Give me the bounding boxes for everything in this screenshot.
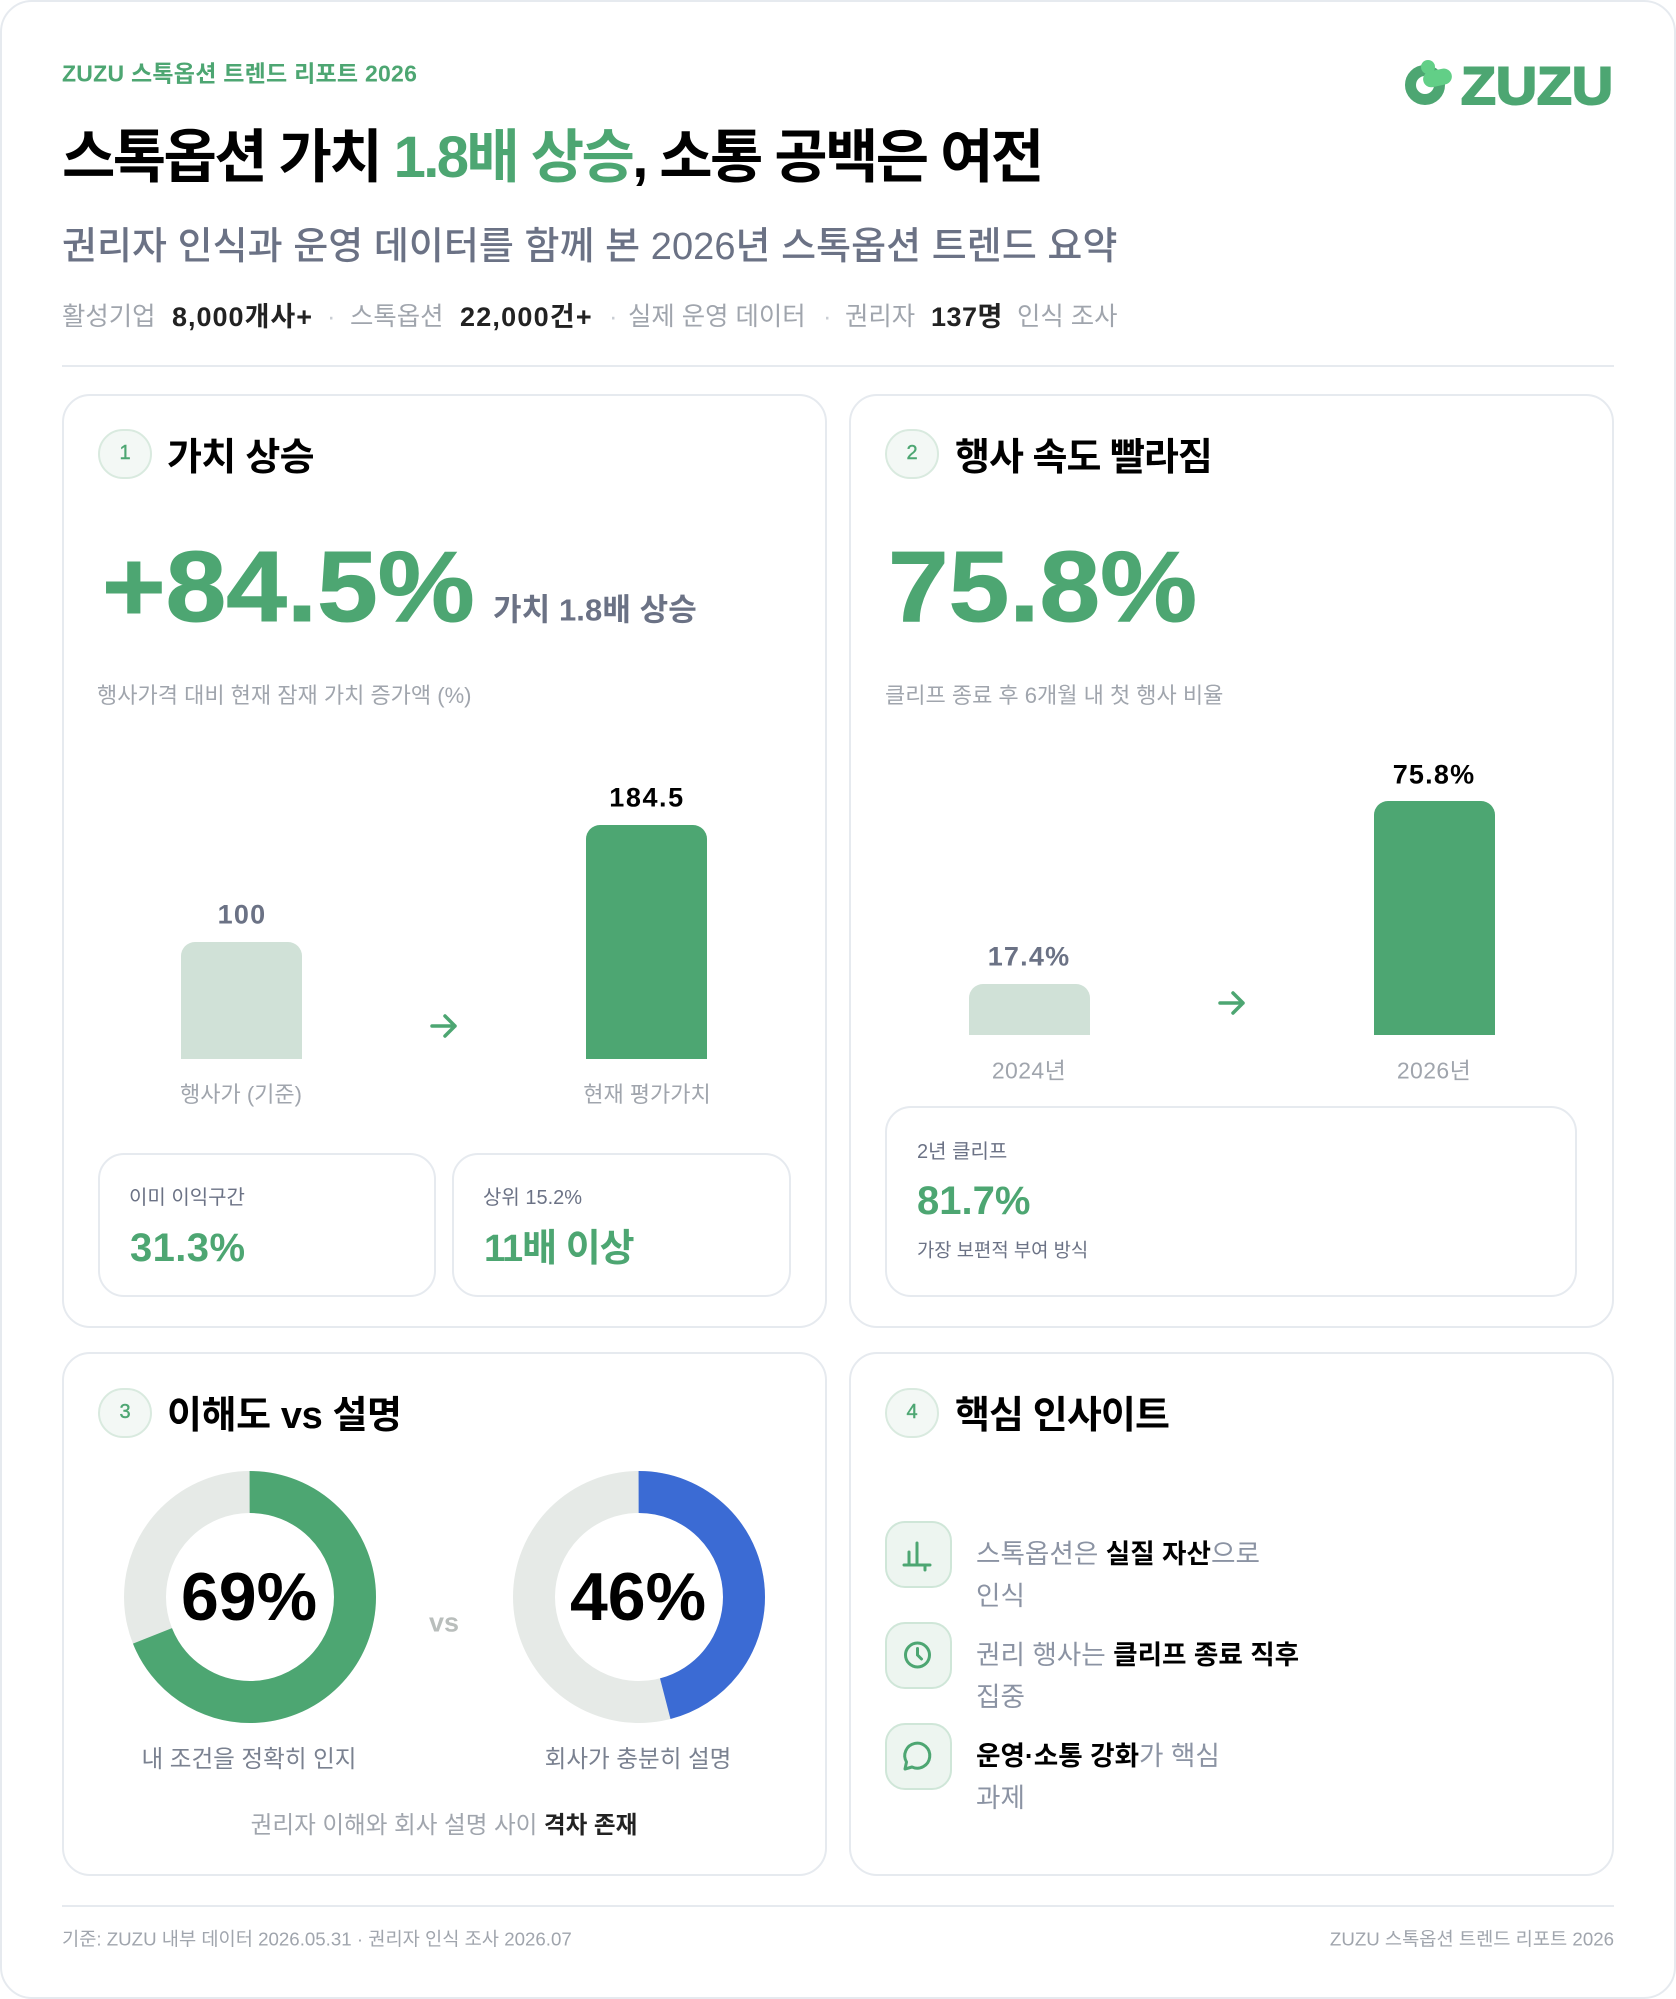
donut 69: 69% xyxy=(181,1559,317,1635)
stat card: profit xyxy=(98,1153,436,1297)
footer source: 기준: ZUZU 내부 데이터 2026.05.31 · 권리자 인식 조사 2026.07 xyxy=(62,1929,572,1950)
label 100: 100 xyxy=(218,900,266,930)
bar chart: value xyxy=(180,782,711,1107)
arrow 2 xyxy=(1218,991,1245,1015)
stats row: 137명 xyxy=(931,302,1003,332)
logo xyxy=(1405,57,1613,116)
title: 스톡옵션 가치 1.8배 상승, 소통 공백은 여전 xyxy=(62,125,1042,190)
label: 상위 15.2% xyxy=(483,1187,582,1209)
stats row: 권리자 xyxy=(845,303,915,331)
badge 4: 4 xyxy=(906,1401,918,1423)
heading 4: 핵심 인사이트 xyxy=(955,1395,1169,1437)
insight 2: 권리 행사는 클리프 종료 직후 xyxy=(976,1640,1299,1670)
value: 81.7% xyxy=(917,1179,1030,1223)
heading 3: 이해도 vs 설명 xyxy=(167,1395,402,1437)
stats row: 8,000개사+ xyxy=(172,302,313,332)
vs label: vs xyxy=(429,1608,459,1638)
donut 46 xyxy=(513,1471,765,1723)
stats row: · xyxy=(823,303,831,331)
donut 69 xyxy=(124,1471,376,1723)
insight 3: 과제 xyxy=(976,1783,1025,1813)
current axis label: 현재 평가가치 xyxy=(583,1082,711,1107)
insight 3 xyxy=(976,1741,1220,1813)
stats row xyxy=(62,302,1118,332)
label 184.5: 184.5 xyxy=(609,782,685,812)
base bar xyxy=(181,942,302,1059)
value: 11배 이상 xyxy=(484,1228,634,1270)
big stat 75.8: 75.8% xyxy=(888,531,1197,643)
badge 1: 1 xyxy=(119,442,131,464)
stat note: 가치 1.8배 상승 xyxy=(493,592,697,628)
panel: understanding xyxy=(62,1352,827,1876)
base axis label: 행사가 (기준) xyxy=(180,1082,302,1107)
stats row: · xyxy=(609,303,617,331)
label: 2년 클리프 xyxy=(917,1141,1007,1163)
subtitle: 권리자 인식과 운영 데이터를 함께 본 2026년 스톡옵션 트렌드 요약 xyxy=(62,226,1117,268)
badge 4 xyxy=(885,1388,939,1438)
panel: exercise speed xyxy=(849,394,1614,1328)
caption 2: 클리프 종료 후 6개월 내 첫 행사 비율 xyxy=(885,683,1223,708)
caption 1: 행사가격 대비 현재 잠재 가치 증가액 (%) xyxy=(97,683,472,708)
2024 axis label: 2024년 xyxy=(992,1058,1066,1084)
stats row: · xyxy=(327,303,335,331)
logo: ZUZU xyxy=(1461,57,1613,116)
arrow 1 xyxy=(430,1014,457,1038)
value: 31.3% xyxy=(130,1226,245,1270)
label: 이미 이익구간 xyxy=(129,1187,245,1209)
gap note: 권리자 이해와 회사 설명 사이 격차 존재 xyxy=(251,1813,637,1839)
stats row: 인식 조사 xyxy=(1017,303,1118,331)
donut 46: 46% xyxy=(570,1559,706,1635)
heading 1: 가치 상승 xyxy=(167,437,314,479)
donut label right: 회사가 충분히 설명 xyxy=(545,1747,731,1773)
note: 가장 보편적 부여 방식 xyxy=(917,1240,1088,1261)
footer report name: ZUZU 스톡옵션 트렌드 리포트 2026 xyxy=(1330,1929,1614,1950)
icon: chart xyxy=(885,1521,952,1588)
insight 2 xyxy=(976,1640,1299,1712)
stats row: 실제 운영 데이터 xyxy=(628,303,806,331)
panel: value rise xyxy=(62,394,827,1328)
stats row: 스톡옵션 xyxy=(350,303,443,331)
current bar xyxy=(586,825,707,1059)
insight 2: 집중 xyxy=(976,1682,1025,1712)
panel: insights xyxy=(849,1352,1614,1876)
icon: chat xyxy=(885,1723,952,1790)
stats row: 활성기업 xyxy=(62,303,155,331)
insight 1: 인식 xyxy=(976,1581,1025,1611)
badge 1 xyxy=(98,429,152,479)
2026 bar xyxy=(1374,801,1495,1035)
stats row: 22,000건+ xyxy=(460,302,593,332)
2024 bar xyxy=(969,984,1090,1035)
eyebrow: ZUZU 스톡옵션 트렌드 리포트 2026 xyxy=(62,60,417,86)
bar chart: speed xyxy=(969,760,1495,1084)
badge 2 xyxy=(885,429,939,479)
insight 1: 스톡옵션은 실질 자산으로 xyxy=(976,1539,1260,1569)
label 75.8: 75.8% xyxy=(1393,760,1475,790)
2026 axis label: 2026년 xyxy=(1397,1058,1471,1084)
big stat 84.5: +84.5% xyxy=(102,531,475,643)
insight 3: 운영·소통 강화가 핵심 xyxy=(976,1741,1220,1771)
insight 1 xyxy=(976,1539,1260,1611)
heading 2: 행사 속도 빨라짐 xyxy=(955,437,1212,479)
stat card: top xyxy=(452,1153,791,1297)
badge 2: 2 xyxy=(906,442,918,464)
icon: clock xyxy=(885,1622,952,1689)
stat card: cliff xyxy=(885,1106,1577,1297)
badge 3: 3 xyxy=(119,1401,131,1423)
donut label left: 내 조건을 정확히 인지 xyxy=(141,1747,357,1773)
badge 3 xyxy=(98,1388,152,1438)
label 17.4: 17.4% xyxy=(988,942,1070,972)
